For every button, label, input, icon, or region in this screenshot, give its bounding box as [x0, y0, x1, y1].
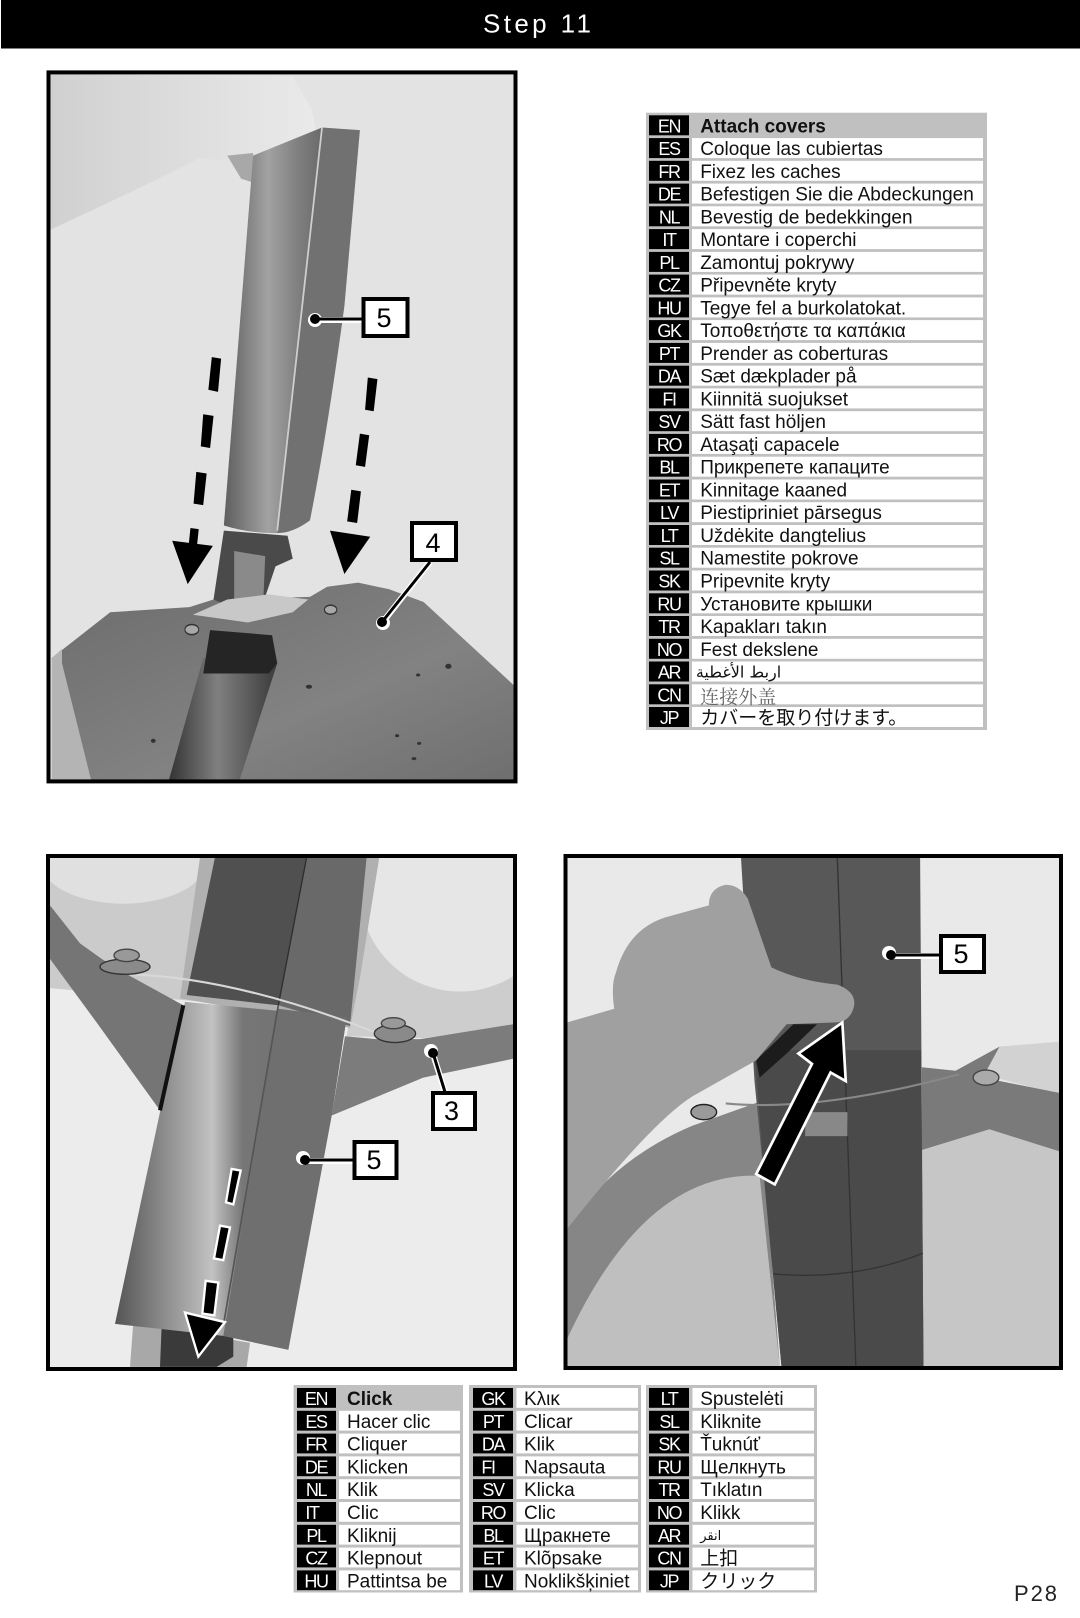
arrow: left dashed down [172, 357, 221, 584]
row NL: NL [306, 1480, 327, 1500]
row BL: BL [483, 1526, 504, 1546]
row SL: SL [659, 1412, 680, 1432]
row PL: Kliknij [347, 1526, 397, 1547]
row BL: Щракнете [524, 1526, 611, 1547]
row SV: SV [658, 412, 681, 432]
row ET: Kinnitage kaaned [700, 480, 847, 502]
lower pole [169, 658, 277, 781]
row FR [297, 1434, 460, 1456]
row NL: Klik [347, 1480, 378, 1501]
row SK [649, 1434, 814, 1456]
row NO: NO [657, 640, 682, 660]
row NO: Fest dekslene [700, 640, 818, 661]
row SL: Kliknite [700, 1412, 761, 1433]
callout: part 3 [424, 1044, 475, 1129]
row FR: FR [305, 1435, 328, 1455]
row EN: Click [347, 1389, 393, 1410]
row NO: Klikk [700, 1503, 741, 1524]
row FR: Fixez les caches [700, 162, 841, 183]
row NL [297, 1479, 460, 1501]
arm holding cover [50, 74, 162, 230]
row CZ [649, 275, 983, 297]
row JP: JP [660, 708, 679, 728]
row ES: ES [305, 1412, 328, 1432]
row SV [473, 1479, 638, 1501]
right arm [332, 1024, 513, 1116]
row ET: Klõpsake [524, 1549, 602, 1570]
row EN [649, 115, 826, 137]
lower cover [115, 1002, 347, 1350]
tube [741, 857, 923, 1367]
row PT: PT [659, 344, 681, 364]
row AR [649, 1525, 814, 1546]
row LV: Noklikšķiniet [524, 1571, 630, 1592]
row DE: Befestigen Sie die Abdeckungen [700, 185, 974, 206]
row JP: カバーを取り付けます。 [700, 707, 907, 729]
row RO [649, 434, 983, 456]
upper tube [187, 857, 307, 1005]
row AR: اربط الأغطية [696, 662, 781, 682]
row PL: PL [659, 253, 680, 273]
row LV: Piestipriniet pārsegus [700, 503, 882, 524]
callout: part 5: 5 [953, 939, 969, 969]
row DE: Klicken [347, 1457, 408, 1478]
row SV: Sätt fast höljen [700, 412, 826, 433]
upper right plate [346, 930, 513, 1038]
title: Step 11 [483, 8, 591, 38]
row LT [649, 525, 983, 547]
right plate [987, 1042, 1059, 1093]
row GK: GK [481, 1389, 506, 1409]
row TR: TR [658, 1480, 681, 1500]
row NO [649, 1502, 814, 1524]
row EN: EN [658, 116, 680, 136]
row LV: LV [660, 503, 679, 523]
row ET: ET [483, 1549, 505, 1569]
row SL: SL [659, 549, 680, 569]
row CN: 连接外盖 [700, 686, 776, 708]
lower pole and bracket [130, 1322, 250, 1367]
row CN: CN [657, 1549, 681, 1569]
row PT [649, 343, 983, 365]
row NO: NO [657, 1503, 682, 1523]
page number: P28 [1014, 1581, 1057, 1606]
row PL [297, 1525, 460, 1547]
row EN: EN [305, 1389, 327, 1409]
callout: part 4 [376, 523, 456, 630]
row RU: Щелкнуть [700, 1457, 786, 1478]
click table: column 2 [469, 1385, 641, 1592]
click table: column 3 [646, 1385, 817, 1592]
cover tube [224, 128, 322, 533]
row ET: ET [659, 480, 681, 500]
callout: part 5 [882, 936, 984, 972]
row CZ: CZ [658, 276, 681, 296]
row RO: Ataşaţi capacele [700, 435, 840, 456]
row CN: 上扣 [700, 1548, 738, 1570]
row RO: RO [657, 435, 682, 455]
row JP: クリック [700, 1570, 776, 1592]
row DA: DA [658, 367, 681, 387]
row FI: Napsauta [524, 1457, 606, 1478]
row AR: AR [658, 1526, 681, 1546]
screws [185, 624, 199, 635]
row FI [473, 1456, 638, 1478]
row SL [649, 548, 983, 570]
row DA: Sæt dækplader på [700, 367, 857, 388]
row PT: Clicar [524, 1412, 573, 1433]
row CZ: Klepnout [347, 1549, 423, 1570]
row SL [649, 1411, 814, 1433]
callout: part 4: 4 [425, 528, 441, 558]
row DA [473, 1434, 638, 1456]
row LV: LV [484, 1571, 503, 1591]
row RU [649, 593, 983, 615]
row RO: Clic [524, 1503, 556, 1524]
row CZ [297, 1548, 460, 1570]
row NL: NL [659, 207, 680, 227]
row CN [649, 1548, 814, 1570]
base plate [52, 583, 515, 781]
row PL [649, 252, 983, 274]
row SK: Pripevnite kryty [700, 572, 831, 592]
central bracket [214, 531, 293, 607]
row JP [649, 1570, 814, 1592]
click table: column 1 [294, 1385, 463, 1592]
header bar [1, 0, 1080, 48]
row TR: Tıklatın [700, 1480, 763, 1501]
row CZ: Připevněte kryty [700, 276, 837, 297]
row SV [649, 411, 983, 433]
plate edge [726, 1074, 959, 1105]
screws [100, 959, 150, 974]
row ES: Hacer clic [347, 1412, 430, 1433]
row ES: ES [658, 139, 681, 159]
row TR: TR [658, 617, 681, 637]
row GK [649, 320, 983, 342]
row FR: FR [658, 162, 681, 182]
row SK: SK [658, 1435, 681, 1455]
row GK [473, 1388, 638, 1410]
row CZ: CZ [305, 1549, 328, 1569]
row EN: Attach covers [700, 116, 826, 137]
instruction table: Attach covers [646, 113, 987, 730]
row HU: HU [304, 1571, 328, 1591]
screws [691, 1104, 717, 1120]
row SV: SV [482, 1480, 505, 1500]
row DA: DA [482, 1435, 505, 1455]
curved plate edge [130, 974, 377, 1033]
arrow: push up [756, 1023, 846, 1184]
row LT: Uždėkite dangtelius [700, 526, 866, 547]
row CN [649, 684, 983, 708]
row LV [649, 502, 983, 524]
row PL: PL [306, 1526, 327, 1546]
row FI [649, 388, 983, 410]
row CN: CN [657, 685, 681, 705]
row IT [649, 229, 983, 251]
row IT: IT [305, 1503, 320, 1523]
row GK: Τοποθετήστε τα καπάκια [700, 321, 906, 342]
row PL: Zamontuj pokrywy [700, 253, 855, 274]
row SK: SK [658, 572, 681, 592]
upper left plate [50, 881, 197, 1002]
callout: part 5: 5 [376, 303, 392, 333]
row BL [473, 1525, 638, 1547]
row HU [649, 297, 983, 319]
row RO: RO [481, 1503, 506, 1523]
row DE [297, 1456, 460, 1478]
row ES [297, 1411, 460, 1433]
row SV: Klicka [524, 1480, 575, 1501]
row LV [473, 1570, 638, 1592]
photo panel: pressing cover closed [565, 856, 1061, 1368]
row BL: BL [659, 458, 680, 478]
callout: part 5 [296, 1142, 396, 1178]
row NL: Bevestig de bedekkingen [700, 207, 913, 228]
row BL: Прикрепете капаците [700, 458, 890, 479]
row RU: Установите крышки [700, 594, 872, 615]
left arm [50, 905, 183, 1110]
row JP: JP [660, 1571, 679, 1591]
row FI: FI [662, 389, 676, 409]
callout: part 3: 3 [444, 1096, 459, 1126]
row NL [649, 206, 983, 228]
row RU [649, 1456, 814, 1478]
callout: part 5: 5 [366, 1145, 382, 1175]
row FR [649, 161, 983, 183]
row IT [297, 1502, 460, 1524]
row FI: FI [481, 1457, 495, 1477]
row LT: LT [661, 1389, 679, 1409]
left plate [567, 1102, 780, 1367]
row HU: HU [657, 298, 681, 318]
row EN [297, 1388, 393, 1410]
row TR [649, 616, 983, 638]
hand shadow [756, 1024, 817, 1078]
row FI: Kiinnitä suojukset [700, 389, 849, 410]
row FR: Cliquer [347, 1435, 408, 1456]
photo panel: installing covers [48, 72, 516, 782]
row ES [649, 138, 983, 160]
row TR [649, 1479, 814, 1501]
row ET [649, 480, 983, 502]
row AR: AR [658, 662, 681, 682]
row ES: Coloque las cubiertas [700, 139, 883, 160]
row PT: PT [483, 1412, 505, 1432]
row RU: RU [657, 594, 681, 614]
plate marks [151, 664, 452, 760]
row DA: Klik [524, 1435, 555, 1456]
row LT [649, 1388, 814, 1410]
callout: part 5 [308, 299, 408, 336]
row SK [649, 570, 983, 592]
row RU: RU [657, 1457, 681, 1477]
arrow: right dashed down [330, 378, 377, 574]
row AR [649, 662, 983, 682]
row DE: DE [305, 1457, 328, 1477]
row GK: Κλικ [524, 1389, 560, 1410]
row LT: LT [661, 526, 679, 546]
row RO [473, 1502, 638, 1524]
row DE: DE [658, 185, 681, 205]
row ET [473, 1548, 638, 1570]
row IT: Montare i coperchi [700, 230, 856, 251]
row HU: Tegye fel a burkolatokat. [700, 298, 906, 319]
upper tube flanks [180, 857, 379, 1028]
row PT: Prender as coberturas [700, 344, 888, 365]
row HU [297, 1570, 460, 1592]
row AR: انقر [699, 1529, 721, 1544]
row IT: Clic [347, 1503, 379, 1524]
hand and arm [567, 885, 854, 1229]
row IT: IT [662, 230, 677, 250]
row PT [473, 1411, 638, 1433]
row BL [649, 457, 983, 479]
row NO [649, 639, 983, 661]
row LT: Spustelėti [700, 1389, 784, 1410]
row TR: Kapakları takın [700, 617, 827, 638]
row SL: Namestite pokrove [700, 549, 859, 570]
photo panel: cover seated on pole [46, 854, 517, 1371]
row SK: Ťuknúť [700, 1434, 761, 1456]
row HU: Pattintsa be [347, 1571, 447, 1592]
row GK: GK [657, 321, 682, 341]
row DA [649, 366, 983, 388]
row JP [649, 707, 983, 729]
arrow: dashed down [185, 1169, 241, 1357]
